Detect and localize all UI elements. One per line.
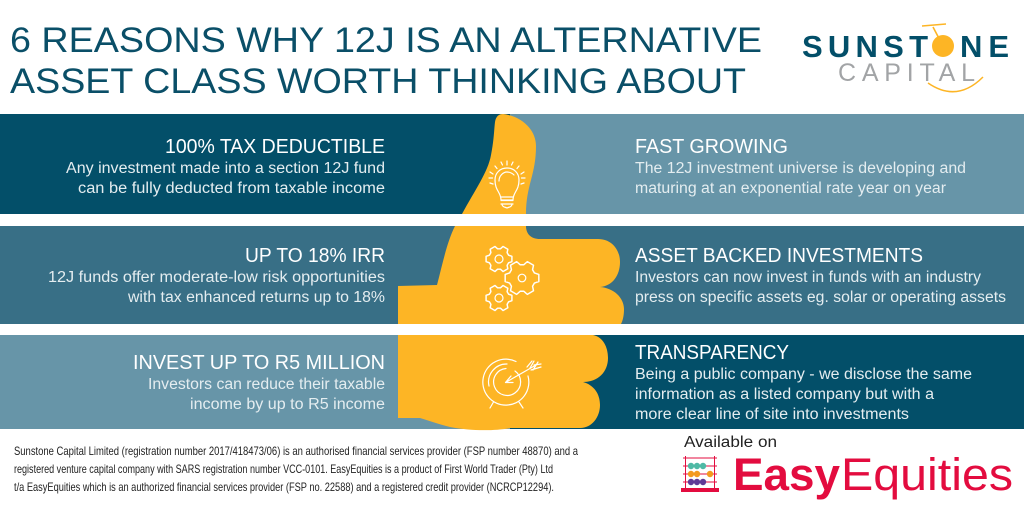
text block: invest up to R5 million: income by up to R5 income	[190, 396, 385, 413]
panel: band 1 left	[0, 114, 510, 214]
text block: transparency	[635, 342, 972, 423]
title: 6 REASONS WHY 12J IS AN ALTERNATIVE	[10, 21, 762, 60]
text block: invest up to R5 million: INVEST UP TO R5 MILLION	[133, 352, 385, 374]
text block: transparency: information as a listed company but with a	[635, 386, 934, 403]
logo: EasyEquities: Equities	[841, 449, 1013, 500]
text block: up to 18% IRR: with tax enhanced returns up to 18%	[127, 289, 385, 306]
icon: light bulb	[489, 161, 525, 208]
text block: invest up to R5 million: Investors can reduce their taxable	[148, 376, 385, 393]
text block: 100% tax deductible: Any investment made into a section 12J fund	[66, 160, 385, 177]
text block: up to 18% IRR	[48, 245, 385, 306]
text block: 100% tax deductible: 100% TAX DEDUCTIBLE	[165, 136, 385, 158]
title: ASSET CLASS WORTH THINKING ABOUT	[10, 62, 746, 101]
icon: gears	[486, 246, 539, 311]
text block: legal disclaimer: t/a EasyEquities which is an authorized financial services provider (FSP no. 22588) and a registered credit provider (NCRCP12294).	[14, 480, 554, 494]
panel: band 1 right	[510, 114, 1024, 214]
text block: legal disclaimer: Sunstone Capital Limited (registration number 2017/418473/06) is an authorised financial services provider (FSP number 48870) and a	[14, 444, 578, 458]
logo: Sunstone Capital: SUNST	[802, 29, 928, 64]
text block: up to 18% IRR: 12J funds offer moderate-low risk opportunities	[48, 269, 385, 286]
text block: asset backed investments: ASSET BACKED INVESTMENTS	[635, 245, 923, 267]
text block: transparency: Being a public company - we disclose the same	[635, 366, 972, 383]
text block: fast growing: The 12J investment universe is developing and	[635, 160, 966, 177]
panel: band 3 right	[510, 335, 1024, 429]
text block: 100% tax deductible	[66, 136, 385, 197]
logo: Sunstone Capital: CAPITAL	[838, 59, 975, 87]
text block: legal disclaimer: registered venture capital company with SARS registration number VCC-0101. EasyEquities is a product of First World Trader (Pty) Ltd	[14, 462, 553, 476]
text block: invest up to R5 million	[133, 352, 385, 413]
text block: fast growing: maturing at an exponential rate year on year	[635, 180, 946, 197]
text block: 100% tax deductible: can be fully deducted from taxable income	[78, 180, 385, 197]
icon: abacus	[681, 456, 719, 492]
logo: EasyEquities: Easy	[733, 449, 840, 500]
text: available on: Available on	[684, 434, 777, 451]
text block: asset backed investments: Investors can now invest in funds with an industry	[635, 269, 981, 286]
text block: fast growing: FAST GROWING	[635, 136, 788, 158]
text block: transparency: TRANSPARENCY	[635, 342, 789, 364]
icon: target with arrow	[483, 359, 541, 408]
text block: asset backed investments	[635, 245, 1006, 306]
panel: band 2	[0, 226, 1024, 324]
logo: Sunstone Capital: NE	[960, 29, 1009, 64]
text block: transparency: more clear line of site into investments	[635, 406, 909, 423]
title	[10, 21, 762, 101]
text block: up to 18% IRR: UP TO 18% IRR	[245, 245, 385, 267]
logo: EasyEquities	[733, 449, 1013, 500]
panel: band 3 left	[0, 335, 510, 429]
thumbs-up hand	[398, 114, 624, 430]
logo: Sunstone Capital	[802, 24, 1009, 92]
text block: asset backed investments: press on specific assets eg. solar or operating assets	[635, 289, 1006, 306]
text block: fast growing	[635, 136, 966, 197]
text block: legal disclaimer	[14, 444, 578, 494]
